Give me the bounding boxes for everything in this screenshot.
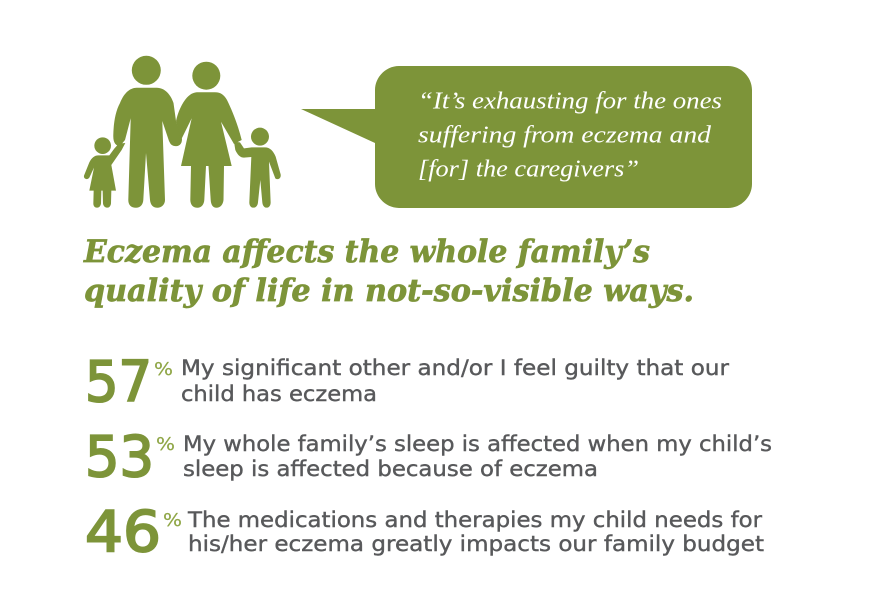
statement: guilt: child has eczema bbox=[181, 382, 377, 406]
statistic: 57 percent: % bbox=[154, 359, 173, 380]
statement: sleep bbox=[183, 432, 772, 481]
statistic: 46 percent: 46 bbox=[85, 500, 161, 565]
statistic: 46 percent: % bbox=[163, 510, 182, 531]
statistic: 53 percent bbox=[85, 425, 772, 490]
statistic: 46 percent bbox=[85, 500, 764, 565]
icon: left child bbox=[84, 137, 125, 208]
quote text: suffering from eczema and bbox=[418, 122, 712, 148]
heading: Eczema affects the whole family’s bbox=[83, 234, 650, 270]
statement: budget bbox=[187, 508, 764, 556]
statement: budget: his/her eczema greatly impacts our family budget bbox=[188, 532, 764, 556]
statement: budget: The medications and therapies my child needs for bbox=[187, 508, 762, 532]
statistic: 53 percent: % bbox=[156, 434, 175, 455]
speech bubble with quote bbox=[301, 66, 752, 208]
icon: right child bbox=[234, 128, 281, 208]
icon: family of four holding hands bbox=[84, 56, 281, 208]
quote text: [for] the caregivers” bbox=[418, 156, 639, 182]
quote text bbox=[418, 88, 722, 182]
statistic: 53 percent: 53 bbox=[85, 425, 154, 490]
statistic: 57 percent bbox=[85, 350, 729, 415]
statement: guilt: My significant other and/or I feel guilty that our bbox=[181, 356, 729, 380]
heading: quality of life in not-so-visible ways. bbox=[84, 273, 694, 309]
statistic: 57 percent: 57 bbox=[85, 350, 152, 415]
icon: father bbox=[113, 56, 182, 208]
statement: guilt bbox=[181, 356, 729, 406]
statement: sleep: My whole family’s sleep is affected when my child’s bbox=[183, 432, 772, 456]
quote text: “It’s exhausting for the ones bbox=[418, 88, 722, 114]
statement: sleep: sleep is affected because of eczema bbox=[183, 457, 598, 481]
icon: mother bbox=[176, 62, 242, 208]
heading bbox=[83, 234, 694, 309]
